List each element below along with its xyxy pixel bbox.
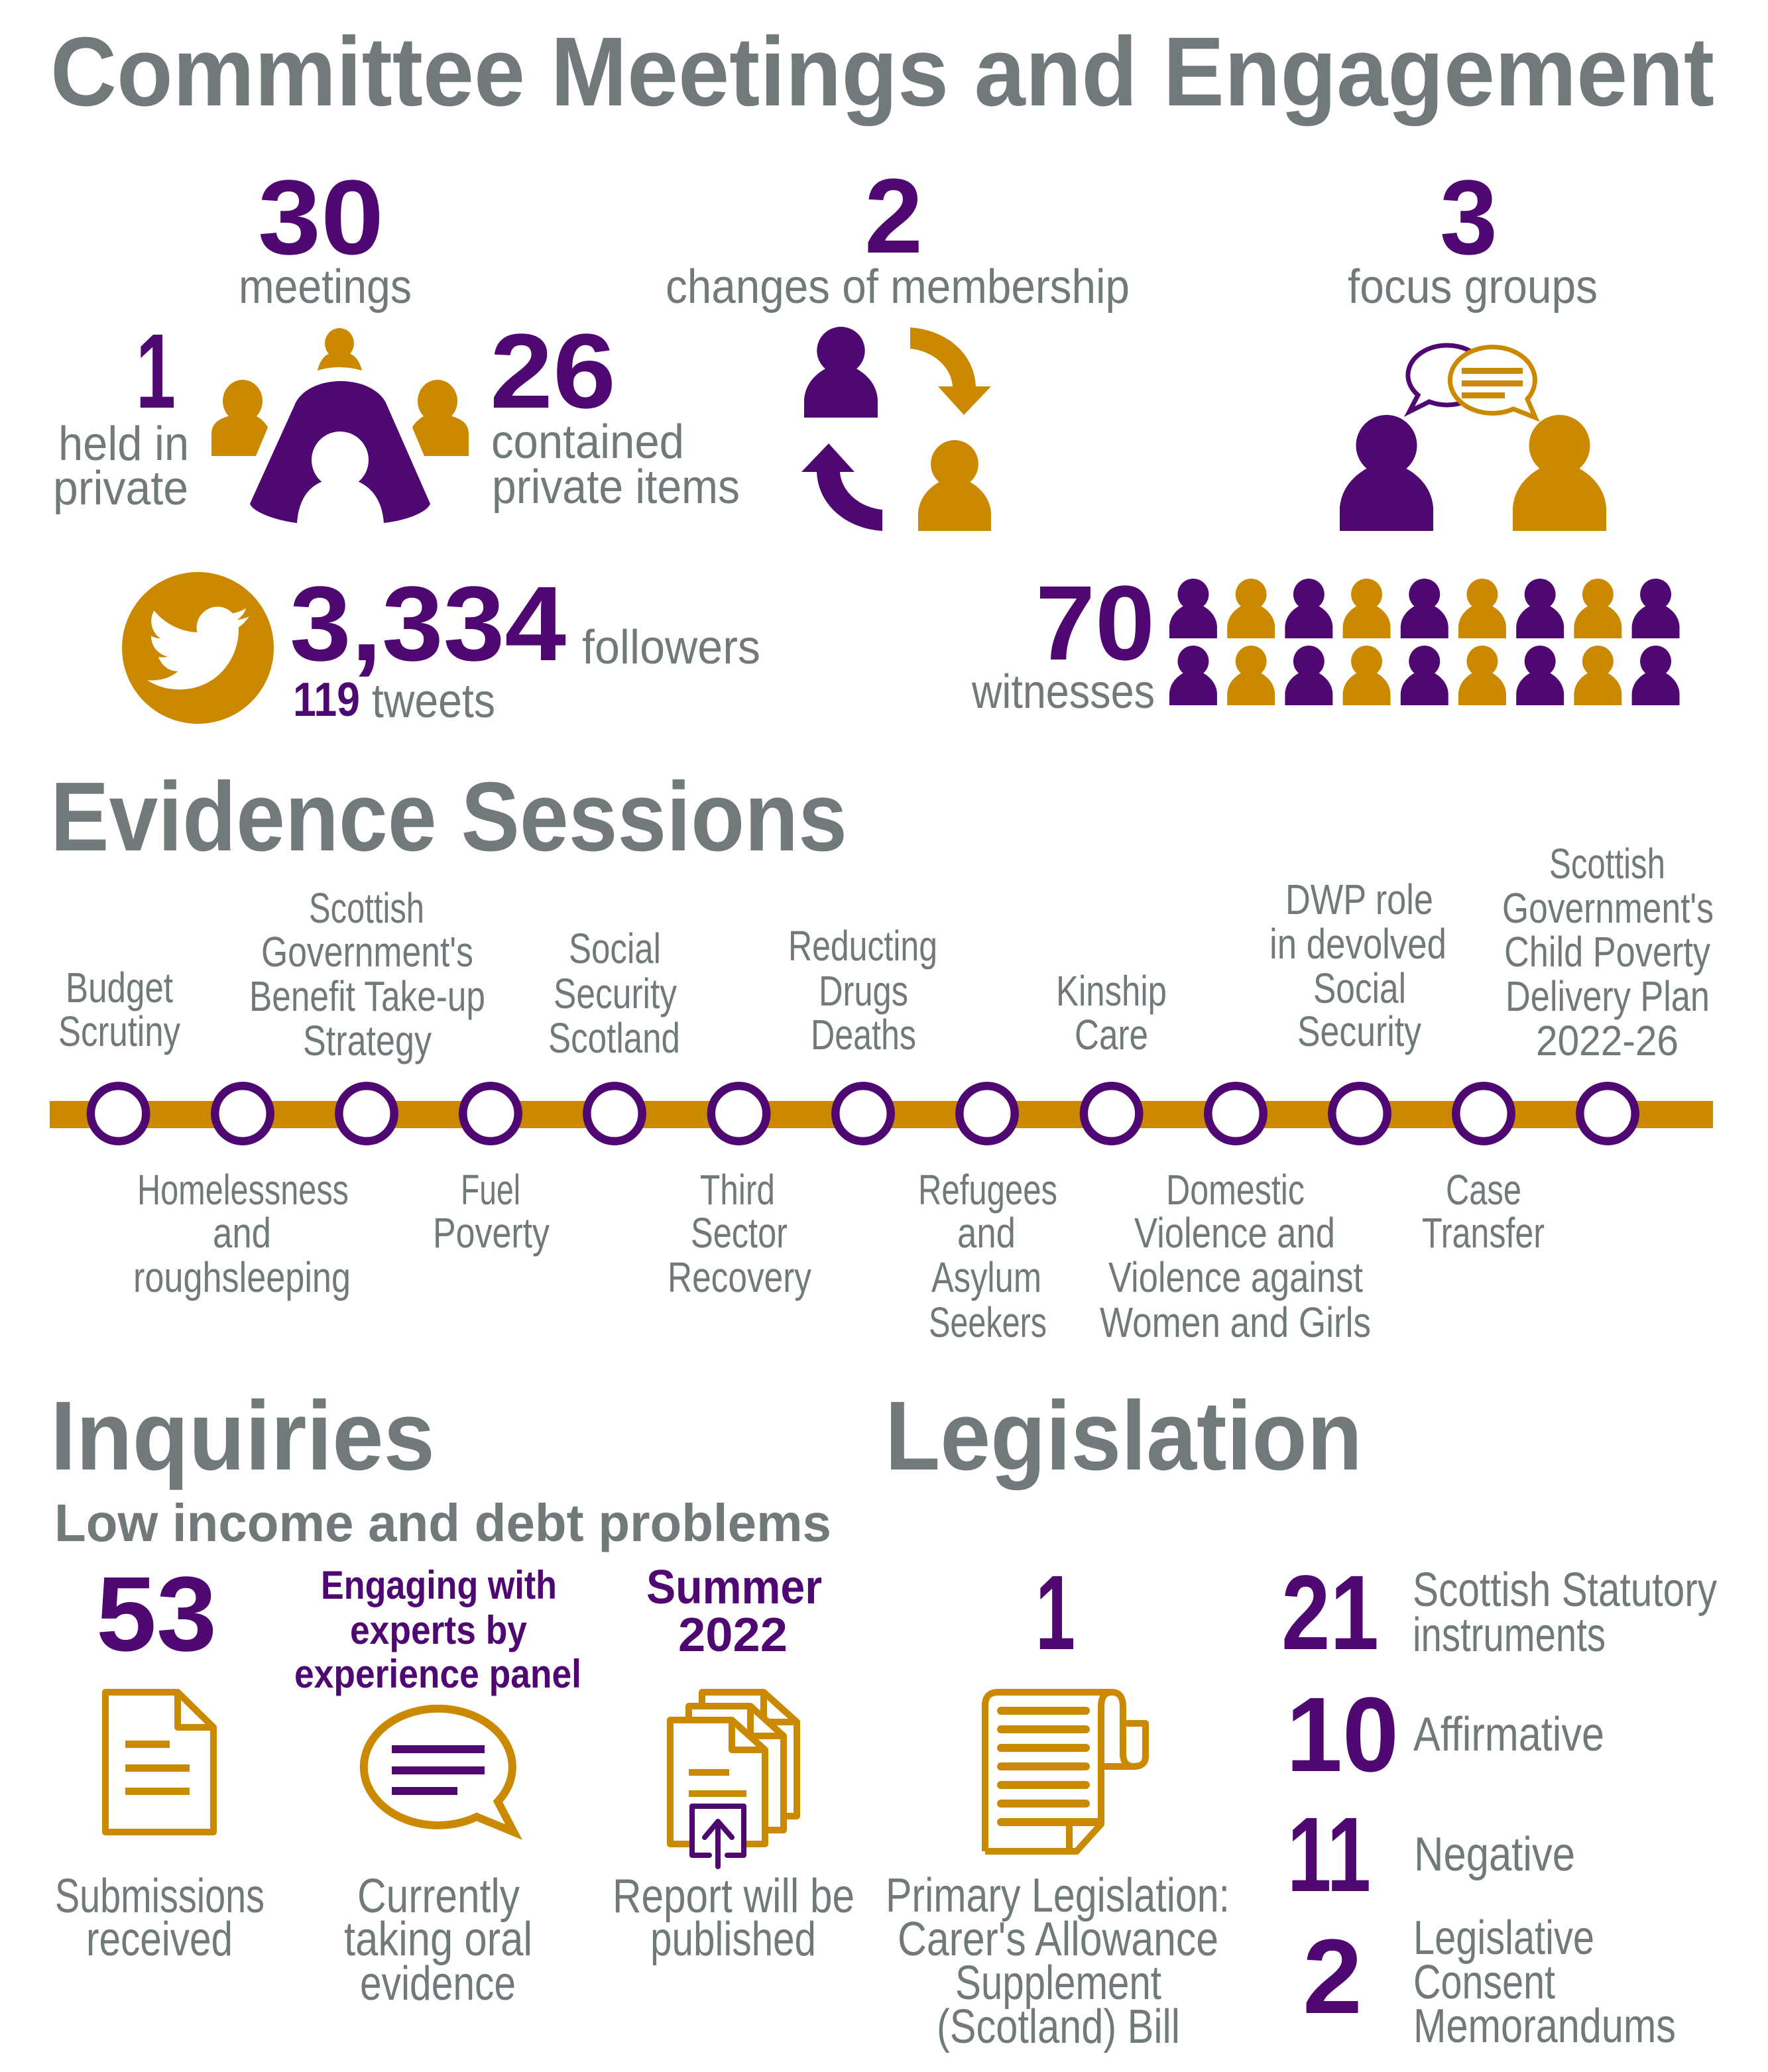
text: Engaging with experts by experience panel: Engaging with [321, 1563, 557, 1607]
label: Social Security Scotland: Security [554, 970, 677, 1017]
text: Engaging with experts by experience panel: experience panel [294, 1652, 581, 1696]
label: Domestic Violence and Violence against Women and Girls: Women and Girls [1100, 1298, 1371, 1346]
label: Scottish Government's Child Poverty Delivery Plan 2022-26: Scottish [1549, 840, 1665, 888]
number: 30 meetings: meetings [239, 260, 412, 314]
label: Third Sector Recovery: Sector [691, 1209, 788, 1257]
number: 70 witnesses: witnesses [971, 665, 1155, 719]
number: 2 changes of membership [666, 156, 1130, 314]
text: Primary Legislation: Carer's Allowance Supplement (Scotland) Bill: Primary Legislation: [886, 1869, 1230, 1922]
panel: focus groups [1340, 158, 1606, 531]
number: 2 changes of membership: changes of membership [666, 260, 1130, 314]
text: Primary Legislation: Carer's Allowance Supplement (Scotland) Bill [886, 1869, 1230, 2053]
panel: legislation [885, 1381, 1717, 2053]
icon: twitter bird [122, 572, 274, 724]
stat: 2 Legislative Consent Memorandums: 2 [1303, 1917, 1362, 2036]
label: Reducting Drugs Deaths: Drugs [819, 967, 908, 1015]
icon: swapping members [801, 327, 991, 531]
label: Fuel Poverty [433, 1166, 550, 1257]
label: Case Transfer: Transfer [1422, 1209, 1545, 1257]
label: Third Sector Recovery: Recovery [668, 1253, 811, 1301]
label: Case Transfer [1422, 1166, 1545, 1257]
icon: stacked report with upload arrow [670, 1692, 797, 1867]
text: Primary Legislation: Carer's Allowance Supplement (Scotland) Bill: (Scotland) Bill [937, 2000, 1180, 2053]
label: DWP role in devolved Social Security [1269, 876, 1446, 1055]
text: Report will be published: published [650, 1913, 816, 1966]
text: Submissions received [55, 1870, 265, 1966]
number: 1 held in private: private [53, 462, 188, 515]
text: Report will be published: Report will be [613, 1870, 855, 1923]
number: 1 held in private: 1 [136, 312, 176, 430]
icon: grid of people [1169, 579, 1680, 705]
label: Reducting Drugs Deaths: Reducting [788, 922, 937, 970]
stat: 21 Scottish Statutory instruments: instruments [1413, 1609, 1606, 1662]
label: Scottish Government's Child Poverty Delivery Plan 2022-26: Delivery Plan [1505, 972, 1710, 1020]
text: Submissions received: received [86, 1913, 233, 1966]
icon: scroll document [985, 1692, 1146, 1851]
stat: 2 Legislative Consent Memorandums: Memorandums [1413, 2000, 1676, 2053]
number: 3,334 followers [290, 564, 760, 683]
label: Fuel Poverty: Poverty [433, 1209, 550, 1257]
label: Social Security Scotland [548, 925, 680, 1062]
number: 1 held in private [53, 312, 189, 515]
text: Submissions received: Submissions [55, 1870, 265, 1923]
number: 30 meetings [239, 158, 412, 314]
stat: 2 Legislative Consent Memorandums: Consent [1413, 1956, 1555, 2009]
stat: 10 Affirmative: Affirmative [1413, 1708, 1604, 1761]
label: Scottish Government's Child Poverty Delivery Plan 2022-26: Child Poverty [1504, 928, 1710, 976]
number: 119 tweets: 119 [293, 673, 360, 726]
subheading: Low income and debt problems: Low income and debt problems [54, 1493, 831, 1552]
number: 70 witnesses: 70 [1035, 563, 1155, 682]
number: 26 contained private items: contained [491, 416, 684, 469]
icon: two people talking [1340, 345, 1606, 531]
label: Scottish Government's Benefit Take-up Strategy: Government's [261, 928, 473, 976]
number: 3 focus groups [1348, 158, 1598, 314]
label: DWP role in devolved Social Security: Social [1313, 964, 1406, 1012]
label: Social Security Scotland: Scotland [548, 1014, 680, 1062]
timeline of evidence sessions [50, 840, 1714, 1346]
panel: changes of membership [666, 156, 1130, 531]
label: Domestic Violence and Violence against Women and Girls: Violence against [1108, 1253, 1363, 1301]
label: Refugees and Asylum Seekers: Seekers [929, 1298, 1047, 1346]
label: Refugees and Asylum Seekers: and [957, 1209, 1016, 1257]
label: DWP role in devolved Social Security: DWP role [1285, 876, 1433, 923]
number: 1: 1 [1035, 1553, 1075, 1672]
label: Third Sector Recovery [668, 1166, 811, 1301]
label: Third Sector Recovery: Third [700, 1166, 775, 1214]
number: 70 witnesses [971, 563, 1155, 719]
number: 3,334 followers: followers [582, 621, 760, 674]
text: Engaging with experts by experience panel [294, 1563, 581, 1696]
icon: document [105, 1692, 213, 1832]
label: Budget Scrutiny: Budget [66, 964, 173, 1011]
label: Scottish Government's Benefit Take-up Strategy: Benefit Take-up [249, 972, 485, 1020]
stat: 10 Affirmative: 10 [1286, 1675, 1399, 1794]
number: 53: 53 [96, 1554, 217, 1673]
text: Currently taking oral evidence [344, 1870, 532, 2010]
stat: 10 Affirmative [1286, 1675, 1604, 1794]
text: Summer 2022: 2022 [678, 1609, 788, 1662]
icon: speech bubble [364, 1709, 514, 1832]
number: 3 focus groups: 3 [1440, 158, 1498, 276]
label: Scottish Government's Child Poverty Delivery Plan 2022-26: Government's [1502, 884, 1714, 932]
label: Homelessness and roughsleeping: and [213, 1209, 271, 1257]
stat: 11 Negative: Negative [1414, 1828, 1575, 1881]
label: Refugees and Asylum Seekers: Refugees [918, 1166, 1057, 1214]
stat: 21 Scottish Statutory instruments: 21 [1281, 1553, 1379, 1672]
text: Summer 2022 [646, 1561, 822, 1662]
number: 3,334 followers: 3,334 [290, 564, 566, 683]
text: Primary Legislation: Carer's Allowance Supplement (Scotland) Bill: Supplement [955, 1957, 1161, 2010]
label: Domestic Violence and Violence against Women and Girls: Violence and [1134, 1209, 1335, 1257]
heading: Legislation: Legislation [885, 1381, 1362, 1491]
text: Currently taking oral evidence: Currently [357, 1870, 520, 1923]
label: Scottish Government's Benefit Take-up Strategy: Strategy [303, 1017, 432, 1065]
label: Case Transfer: Case [1446, 1166, 1521, 1214]
label: Kinship Care: Care [1075, 1011, 1148, 1059]
panel: twitter [122, 564, 760, 728]
panel: meetings [53, 158, 740, 524]
timeline bar and stops [50, 1086, 1713, 1141]
number: 119 tweets [293, 673, 495, 728]
label: Homelessness and roughsleeping: Homelessness [137, 1166, 349, 1214]
label: Homelessness and roughsleeping: roughsleeping [133, 1253, 351, 1301]
stat: 21 Scottish Statutory instruments [1281, 1553, 1717, 1672]
label: Kinship Care: Kinship [1056, 967, 1167, 1015]
label: Refugees and Asylum Seekers [918, 1166, 1057, 1346]
label: DWP role in devolved Social Security: in devolved [1269, 920, 1446, 968]
icon: committee table with people [211, 328, 469, 524]
stat: 11 Negative [1287, 1795, 1575, 1914]
text: Report will be published [613, 1870, 855, 1966]
label: Fuel Poverty: Fuel [461, 1166, 520, 1214]
text: Primary Legislation: Carer's Allowance Supplement (Scotland) Bill: Carer's Allowance [898, 1913, 1218, 1966]
label: Domestic Violence and Violence against Women and Girls [1100, 1166, 1371, 1346]
label: Refugees and Asylum Seekers: Asylum [931, 1253, 1041, 1301]
heading: Evidence Sessions: Evidence Sessions [50, 762, 847, 872]
panel: inquiries [50, 1381, 855, 2010]
stat: 2 Legislative Consent Memorandums: Legislative [1413, 1912, 1594, 1965]
stat: 11 Negative: 11 [1287, 1795, 1371, 1914]
label: Scottish Government's Benefit Take-up Strategy: Scottish [309, 884, 424, 932]
label: Scottish Government's Child Poverty Delivery Plan 2022-26: 2022-26 [1536, 1017, 1679, 1065]
text: Currently taking oral evidence: taking oral [344, 1913, 532, 1966]
label: Reducting Drugs Deaths [788, 922, 937, 1059]
number: 26 contained private items: private items [492, 461, 740, 514]
number: 26 contained private items: 26 [490, 312, 616, 430]
label: Kinship Care [1056, 967, 1167, 1059]
label: Reducting Drugs Deaths: Deaths [811, 1011, 916, 1059]
number: 26 contained private items [490, 312, 740, 514]
stat: 2 Legislative Consent Memorandums [1303, 1912, 1676, 2053]
text: Summer 2022: Summer [646, 1561, 822, 1614]
label: Social Security Scotland: Social [569, 925, 661, 972]
label: Budget Scrutiny [58, 964, 180, 1055]
number: 2 changes of membership: 2 [864, 156, 923, 275]
number: 3 focus groups: focus groups [1348, 260, 1598, 314]
panel: witnesses [971, 563, 1680, 719]
heading: Inquiries: Inquiries [50, 1381, 435, 1491]
text: Engaging with experts by experience panel: experts by [350, 1608, 528, 1652]
label: DWP role in devolved Social Security: Security [1297, 1007, 1421, 1055]
text: Currently taking oral evidence: evidence [360, 1957, 516, 2010]
number: 1 held in private: held in [58, 418, 189, 471]
number: 30 meetings: 30 [258, 158, 384, 276]
label: Budget Scrutiny: Scrutiny [58, 1007, 180, 1055]
label: Scottish Government's Benefit Take-up Strategy [249, 884, 485, 1065]
label: Scottish Government's Child Poverty Delivery Plan 2022-26 [1502, 840, 1714, 1065]
label: Domestic Violence and Violence against Women and Girls: Domestic [1166, 1166, 1305, 1214]
label: Homelessness and roughsleeping [133, 1166, 351, 1301]
number: 119 tweets: tweets [372, 675, 495, 728]
